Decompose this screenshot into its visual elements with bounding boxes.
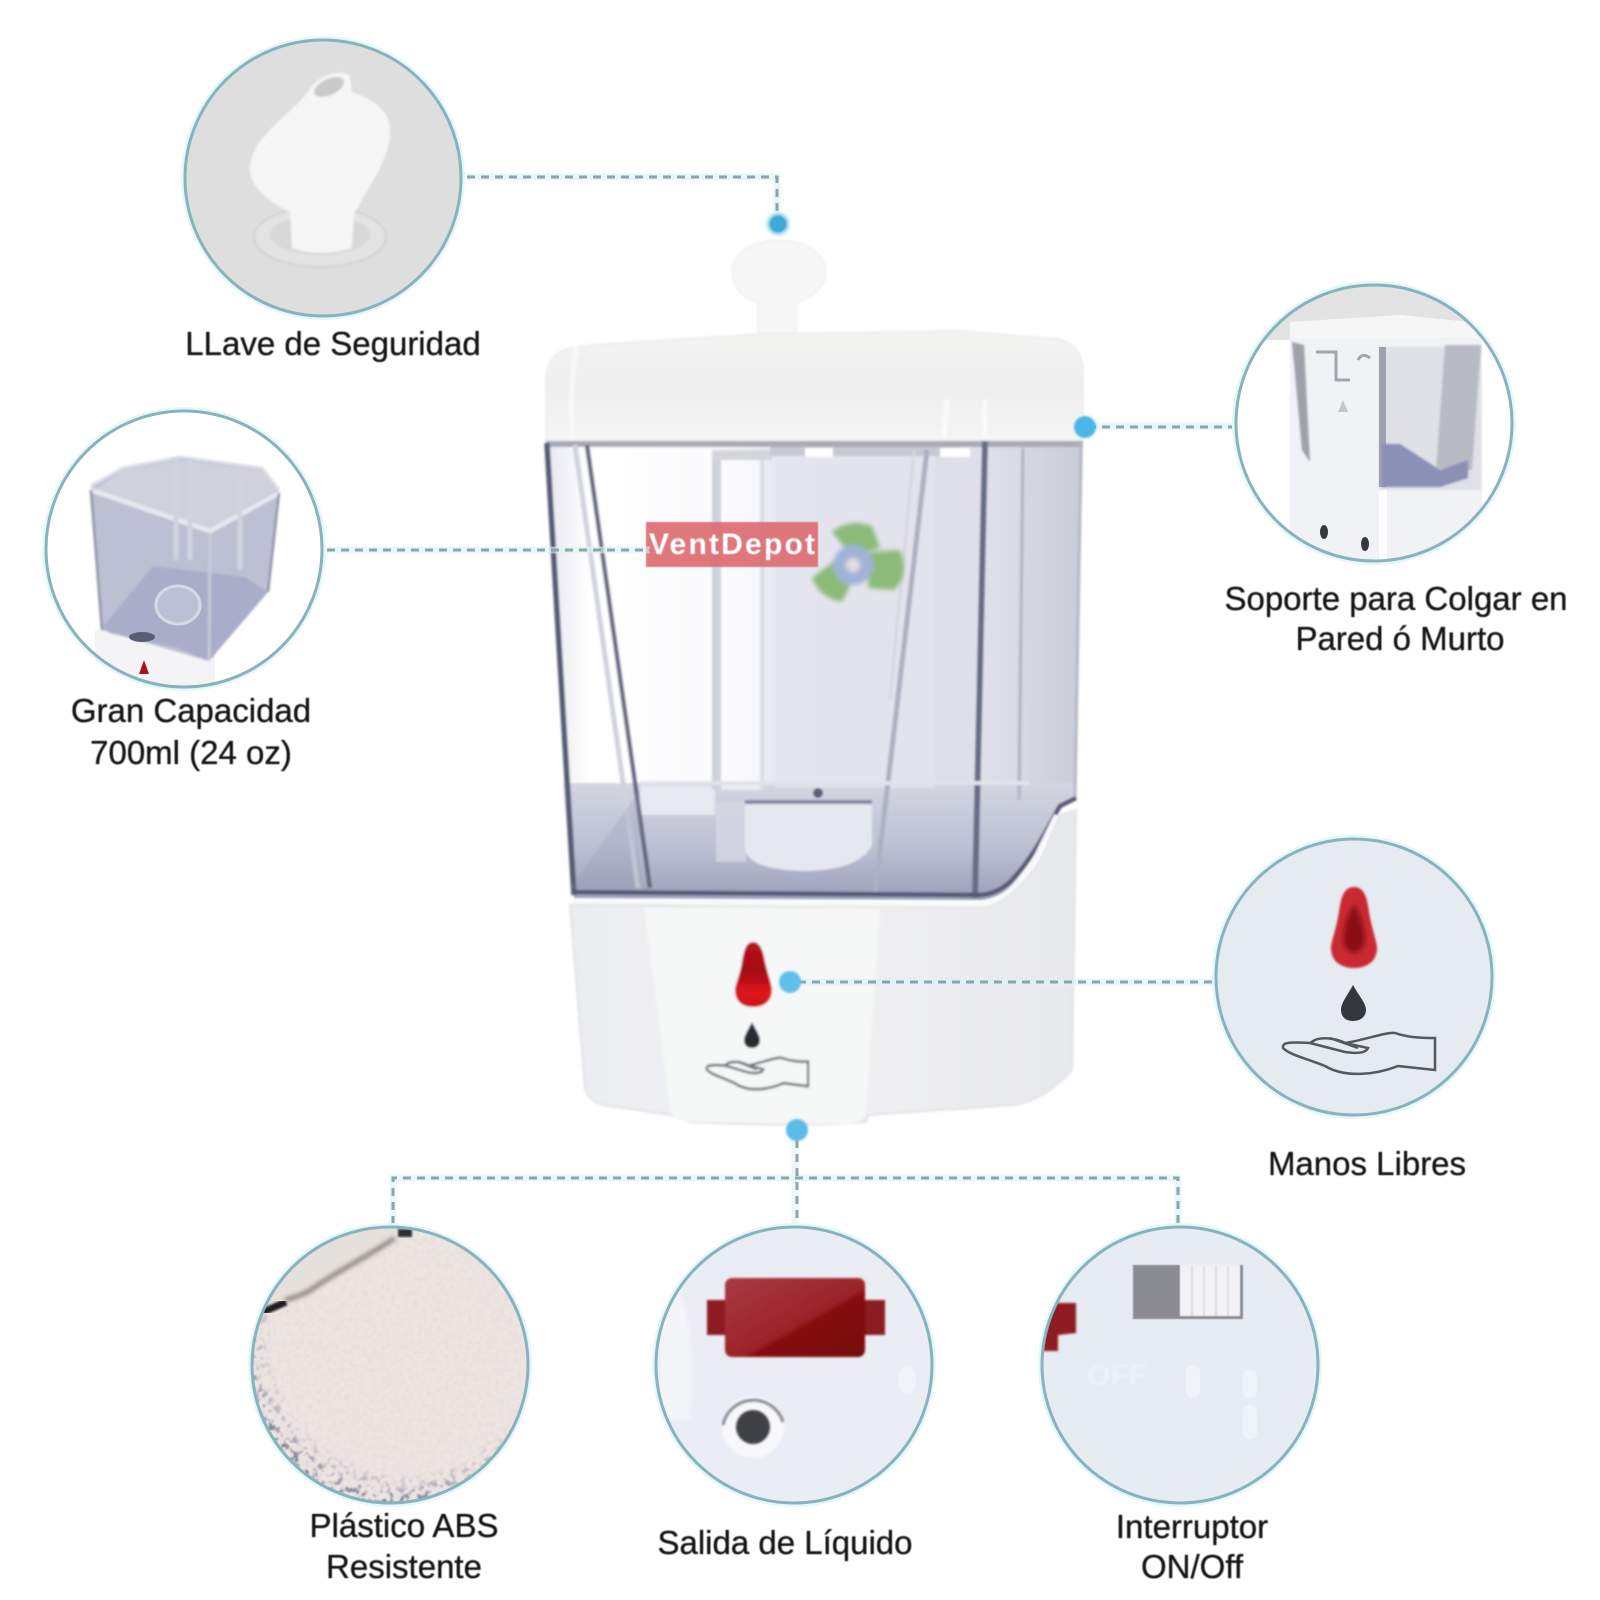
black droplet	[744, 1022, 760, 1048]
main product: dispenser	[546, 240, 1083, 1124]
label: Soporte para Colgar: Soporte para Colgar en	[1224, 580, 1568, 617]
hand icon	[707, 1058, 808, 1089]
label: Soporte para Colgar: Pared ó Murto	[1295, 620, 1505, 657]
label: Salida de Líquido: Salida de Líquido	[657, 1524, 913, 1561]
panel: ABS plastic	[248, 1223, 532, 1507]
connector lines	[327, 177, 1232, 1224]
panel: wall mount	[1230, 280, 1520, 570]
recycling logo	[812, 523, 904, 602]
label: Plástico ABS: Resistente	[326, 1548, 482, 1585]
security key on top	[732, 240, 826, 345]
brand banner: VentDepot: VentDepot	[649, 528, 815, 561]
tank	[546, 441, 1083, 900]
label: Gran Capacidad: Gran Capacidad	[71, 692, 311, 729]
panel: on/off switch	[1040, 1225, 1330, 1515]
lid	[546, 331, 1083, 441]
label: Manos Libres: Manos Libres	[1268, 1145, 1466, 1182]
label: Gran Capacidad: 700ml (24 oz)	[90, 734, 292, 771]
callout dots	[766, 212, 1096, 1141]
label: Plástico ABS: Plástico ABS	[310, 1507, 498, 1544]
label: LLave de Seguridad: LLave de Seguridad	[185, 325, 481, 362]
panel: hands free	[1210, 835, 1500, 1125]
panel: liquid outlet	[650, 1225, 940, 1515]
panel: security key	[180, 35, 470, 325]
label: Interruptor: ON/Off	[1141, 1548, 1244, 1585]
switch	[1133, 1265, 1243, 1319]
panel: on/off switch: OFF	[1087, 1359, 1147, 1392]
panel: capacity tank	[40, 405, 330, 695]
base	[570, 810, 1076, 1124]
label: Interruptor: Interruptor	[1116, 1508, 1268, 1545]
red sensor drop	[735, 942, 772, 1007]
